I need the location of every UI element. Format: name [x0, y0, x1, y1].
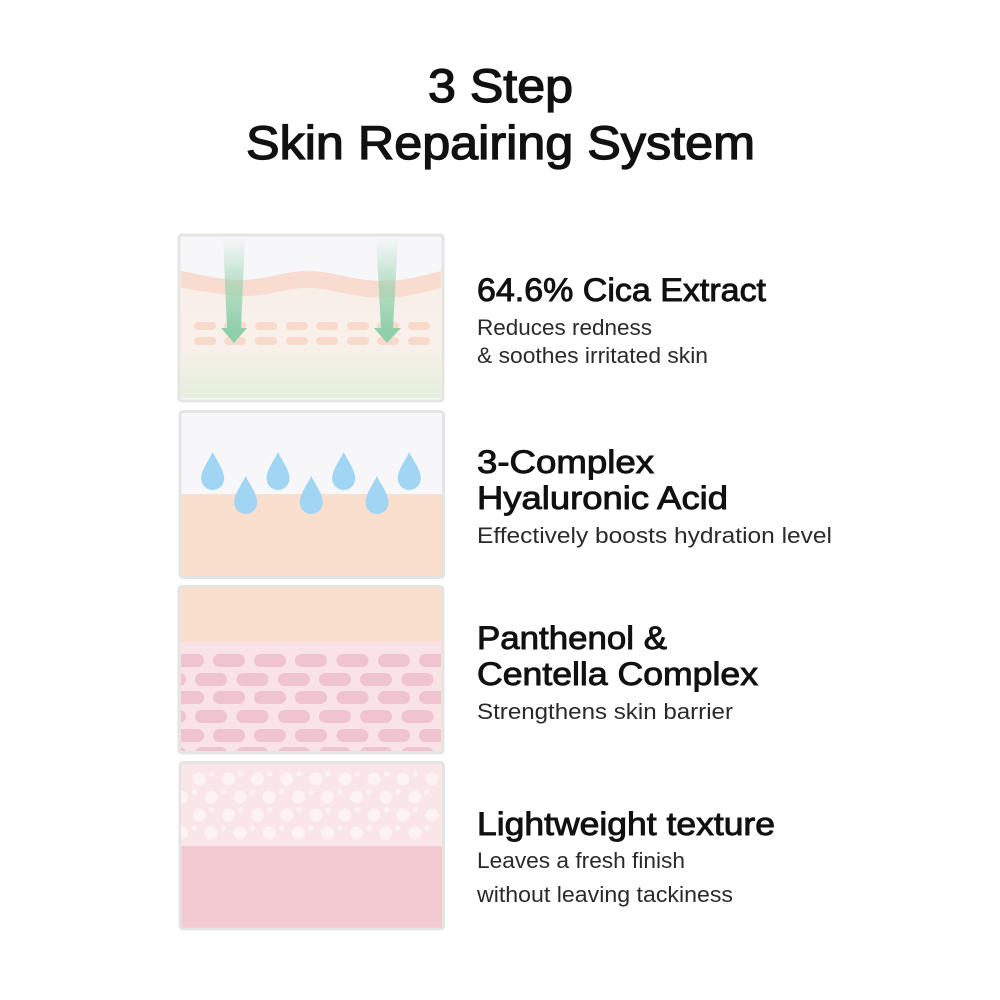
text: cica extract — [477, 272, 766, 368]
text: panthenol and centella: Panthenol & — [477, 620, 667, 656]
text: lightweight texture: Lightweight texture — [477, 806, 775, 842]
arrow left — [221, 238, 247, 343]
arrow right — [374, 238, 401, 343]
panel: lightweight texture illustration — [175, 762, 444, 929]
skin barrier bricks — [181, 654, 441, 751]
text: hyaluronic acid: Hyaluronic Acid — [477, 480, 728, 516]
wavy skin layer — [181, 271, 441, 298]
text: panthenol and centella: Strengthens skin barrier — [477, 699, 733, 724]
title — [246, 59, 755, 169]
panel: cica extract illustration — [179, 235, 443, 401]
water drops — [201, 452, 421, 514]
title: Skin Repairing System — [246, 116, 755, 169]
text: lightweight texture: Leaves a fresh finish — [477, 848, 685, 873]
text: panthenol and centella — [477, 620, 758, 724]
text: cica extract: & soothes irritated skin — [477, 343, 708, 368]
text: lightweight texture — [476, 806, 775, 907]
text: hyaluronic acid — [477, 444, 832, 548]
text: hyaluronic acid: 3-Complex — [477, 444, 654, 480]
text: hyaluronic acid: Effectively boosts hydration level — [477, 523, 832, 548]
skin cell dashes — [194, 322, 430, 345]
text: panthenol and centella: Centella Complex — [477, 656, 758, 692]
panel: panthenol and centella illustration — [178, 585, 444, 754]
text: cica extract: 64.6% Cica Extract — [477, 272, 766, 308]
texture bubbles — [175, 771, 438, 840]
title: 3 Step — [428, 59, 573, 112]
text: cica extract: Reduces redness — [477, 315, 652, 340]
panel: hyaluronic acid illustration — [180, 412, 444, 578]
text: lightweight texture: without leaving tackiness — [476, 882, 733, 907]
